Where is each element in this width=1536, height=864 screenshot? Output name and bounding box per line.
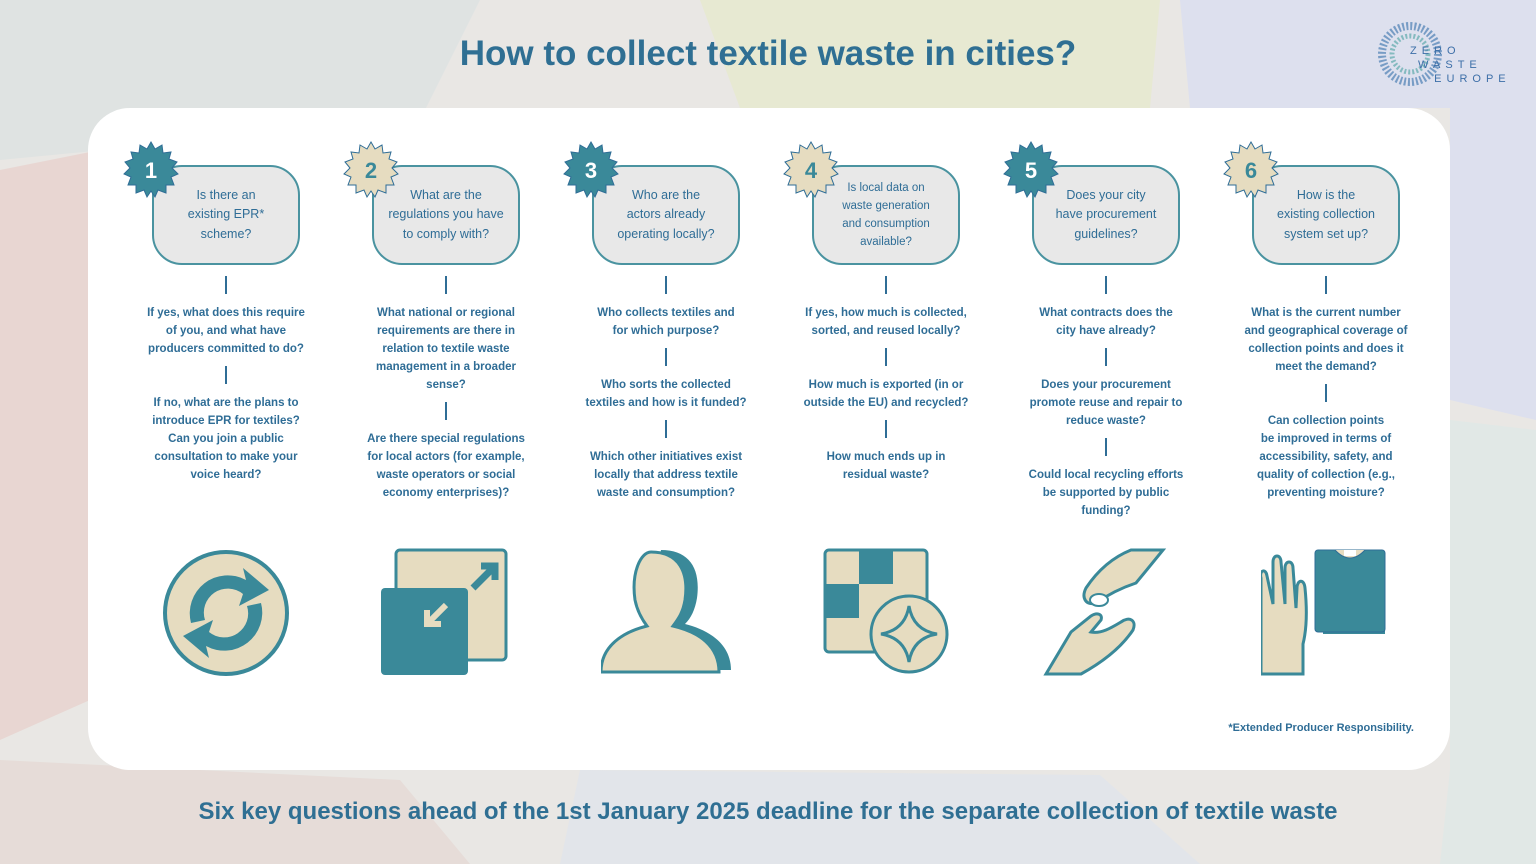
column 3: Who collects textiles and <box>597 307 735 319</box>
column 1 <box>123 141 305 676</box>
badge 6 <box>1223 141 1279 198</box>
column 4: sorted, and reused locally? <box>812 325 960 337</box>
column 2: management in a broader <box>376 361 516 373</box>
column 2: waste operators or social <box>377 469 515 481</box>
icon: hands <box>1043 548 1166 676</box>
column 5: be supported by public <box>1043 487 1169 499</box>
badge 3: 3 <box>585 158 597 183</box>
column 3: actors already <box>627 207 705 221</box>
column 4: available? <box>860 236 912 248</box>
logo: Zero Waste Europe: WASTE <box>1418 59 1482 71</box>
column 5: What contracts does the <box>1039 307 1173 319</box>
column 6: and geographical coverage of <box>1245 325 1407 337</box>
column 5: guidelines? <box>1074 227 1138 241</box>
column 1: Can you join a public <box>168 433 284 445</box>
column 4: outside the EU) and recycled? <box>804 397 968 409</box>
logo: Zero Waste Europe <box>1378 22 1511 86</box>
badge 2: 2 <box>365 158 377 183</box>
column 5: Does your procurement <box>1041 379 1171 391</box>
sub-questions 1: of you, and what have <box>166 325 286 337</box>
subtitle: Six key questions ahead of the 1st January 2025 deadline for the separate collection of textile waste <box>198 798 1338 825</box>
column 3: Which other initiatives exist <box>590 451 742 463</box>
badge 4: 4 <box>805 158 818 183</box>
column 2: for local actors (for example, <box>367 451 525 463</box>
logo: Zero Waste Europe: EUROPE <box>1434 73 1511 85</box>
question bubble 1 <box>152 165 300 265</box>
sub-questions 1: producers committed to do? <box>148 343 304 355</box>
column 4: and consumption <box>842 218 930 230</box>
column 4: waste generation <box>842 200 930 212</box>
column 5: have procurement <box>1056 207 1156 221</box>
badge 6: 6 <box>1245 158 1257 183</box>
column 2 <box>343 141 525 675</box>
column 6: be improved in terms of <box>1261 433 1391 445</box>
column 1: introduce EPR for textiles? <box>152 415 300 427</box>
column 4: residual waste? <box>843 469 929 481</box>
column 4: If yes, how much is collected, <box>805 307 967 319</box>
column 2: Are there special regulations <box>367 433 525 445</box>
column 4: Is local data on <box>847 182 925 194</box>
column 6 <box>1223 141 1408 676</box>
column 1: voice heard? <box>191 469 261 481</box>
column 6: What is the current number <box>1251 307 1401 319</box>
column 5: reduce waste? <box>1066 415 1146 427</box>
icon: recycle <box>163 550 289 676</box>
column 6: quality of collection (e.g., <box>1257 469 1395 481</box>
column 3 <box>563 141 746 674</box>
badge 5: 5 <box>1025 158 1037 183</box>
badge 4 <box>783 141 839 198</box>
footnote: *Extended Producer Responsibility. <box>1228 722 1414 734</box>
column 6: How is the <box>1297 188 1355 202</box>
sub-questions 1 <box>147 307 305 355</box>
question bubble 1: Is there an <box>196 188 256 202</box>
column 3: Who sorts the collected <box>601 379 731 391</box>
icon: hand and folded shirt <box>1261 550 1386 676</box>
column 6: meet the demand? <box>1275 361 1377 373</box>
column 5: city have already? <box>1056 325 1156 337</box>
icon: resize squares <box>381 548 508 675</box>
logo: Zero Waste Europe: ZERO <box>1410 45 1461 57</box>
column 1: consultation to make your <box>154 451 298 463</box>
column 2: economy enterprises)? <box>383 487 509 499</box>
badge 2 <box>343 141 399 198</box>
badge 1 <box>123 141 179 198</box>
column 6: collection points and does it <box>1248 343 1404 355</box>
column 1: If no, what are the plans to <box>153 397 299 409</box>
column 6: accessibility, safety, and <box>1259 451 1393 463</box>
column 5: promote reuse and repair to <box>1030 397 1182 409</box>
column 3: locally that address textile <box>594 469 738 481</box>
column 2: sense? <box>426 379 466 391</box>
column 4: How much is exported (in or <box>809 379 963 391</box>
column 4: How much ends up in <box>827 451 945 463</box>
column 3: operating locally? <box>617 227 715 241</box>
column 2: What are the <box>410 188 482 202</box>
sub-questions 1: If yes, what does this require <box>147 307 305 319</box>
column 5: Does your city <box>1066 188 1146 202</box>
column 6: preventing moisture? <box>1267 487 1385 499</box>
question bubble 1: existing EPR* <box>188 207 264 221</box>
column 6: existing collection <box>1277 207 1375 221</box>
badge 5 <box>1003 141 1059 198</box>
badge 1: 1 <box>145 158 157 183</box>
column 3: for which purpose? <box>613 325 719 337</box>
column 2: relation to textile waste <box>382 343 510 355</box>
icon: tiles and star <box>824 548 948 674</box>
column 5 <box>1003 141 1183 676</box>
column 4 <box>783 141 968 674</box>
column 3: Who are the <box>632 188 700 202</box>
column 3: waste and consumption? <box>597 487 735 499</box>
column 5: Could local recycling efforts <box>1029 469 1183 481</box>
badge 3 <box>563 141 619 198</box>
column 2: regulations you have <box>388 207 504 221</box>
main panel <box>88 108 1450 770</box>
column 6: system set up? <box>1284 227 1368 241</box>
column 5: funding? <box>1081 505 1131 517</box>
column 3: textiles and how is it funded? <box>585 397 746 409</box>
column 2: to comply with? <box>403 227 489 241</box>
column 6: Can collection points <box>1268 415 1384 427</box>
column 2: What national or regional <box>377 307 515 319</box>
column 2: requirements are there in <box>377 325 515 337</box>
title: How to collect textile waste in cities? <box>460 34 1076 73</box>
question bubble 1: scheme? <box>201 227 251 241</box>
icon: people <box>601 550 731 674</box>
